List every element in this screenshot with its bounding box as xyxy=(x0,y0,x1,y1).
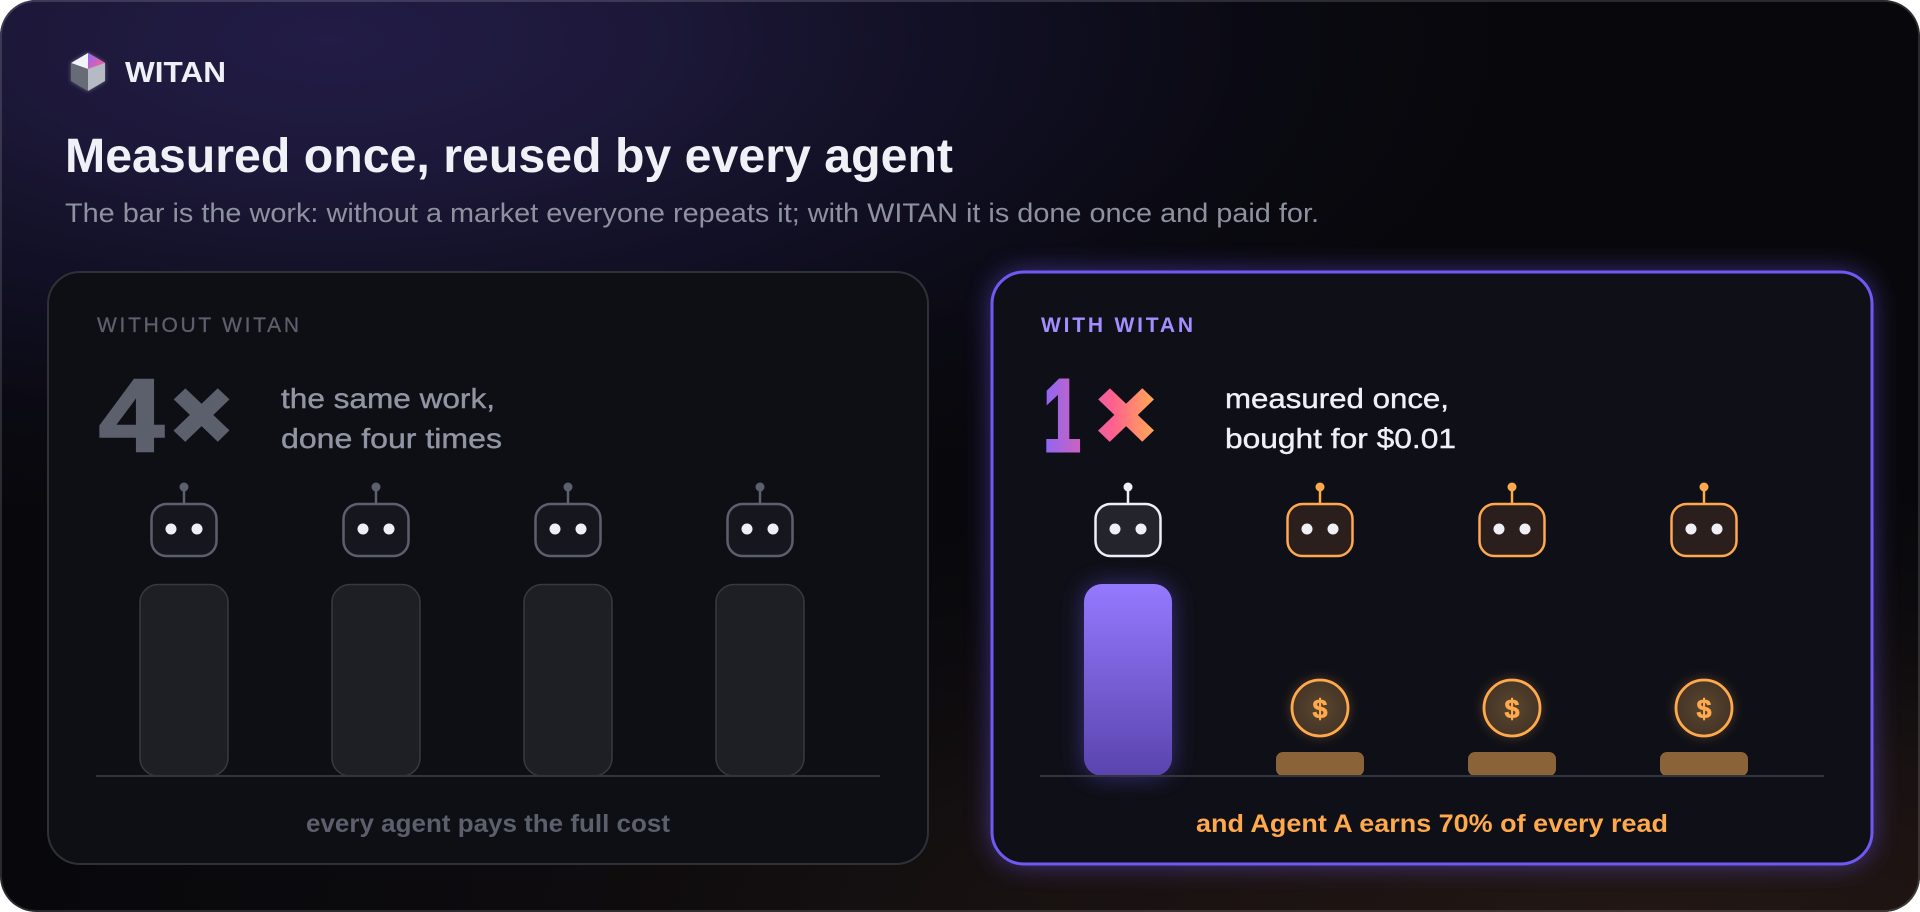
caption: measured once, xyxy=(1225,383,1449,414)
caption xyxy=(1225,383,1456,454)
brand header xyxy=(71,53,226,91)
bar: full work by agent A xyxy=(1084,584,1172,776)
panel: without WITAN xyxy=(48,272,928,864)
big number 1x: × xyxy=(1098,365,1154,465)
subtitle: The bar is the work: without a market everyone repeats it; with WITAN it is done once and paid for. xyxy=(65,198,1319,228)
bar chart: four full work bars xyxy=(140,584,804,776)
caption xyxy=(281,383,502,454)
icon: robot A (measurer) xyxy=(1096,482,1160,556)
brand name: WITAN xyxy=(125,57,226,89)
panel: with WITAN xyxy=(992,272,1872,864)
icon: robot 4 xyxy=(728,482,792,556)
icon: WITAN cube logo xyxy=(71,53,105,91)
big number 4x: 4 xyxy=(99,358,164,473)
coin and small bar D xyxy=(1660,679,1748,776)
icon: robot C (buyer) xyxy=(1480,482,1544,556)
panel label: WITH WITAN xyxy=(1041,314,1193,337)
footer note: and Agent A earns 70% of every read xyxy=(1196,810,1668,838)
big number 4x xyxy=(99,358,229,473)
icon: robot 3 xyxy=(536,482,600,556)
caption: done four times xyxy=(281,423,502,454)
icon: robot D (buyer) xyxy=(1672,482,1736,556)
coin and small bar D: $ xyxy=(1696,694,1712,724)
icon: robot B (buyer) xyxy=(1288,482,1352,556)
footer note: every agent pays the full cost xyxy=(306,810,671,838)
coin and small bar B: $ xyxy=(1312,694,1328,724)
coin and small bar B xyxy=(1276,679,1364,776)
icon: robot 1 xyxy=(152,482,216,556)
panel label: WITHOUT WITAN xyxy=(97,314,299,337)
caption: the same work, xyxy=(281,383,495,414)
big number 1x: 1 xyxy=(1043,358,1081,473)
coin and small bar C: $ xyxy=(1504,694,1520,724)
big number 4x: × xyxy=(174,365,229,465)
coin and small bar C xyxy=(1468,679,1556,776)
title: Measured once, reused by every agent xyxy=(65,130,953,183)
caption: bought for $0.01 xyxy=(1225,423,1456,454)
big number 1x xyxy=(1043,358,1154,473)
icon: robot 2 xyxy=(344,482,408,556)
